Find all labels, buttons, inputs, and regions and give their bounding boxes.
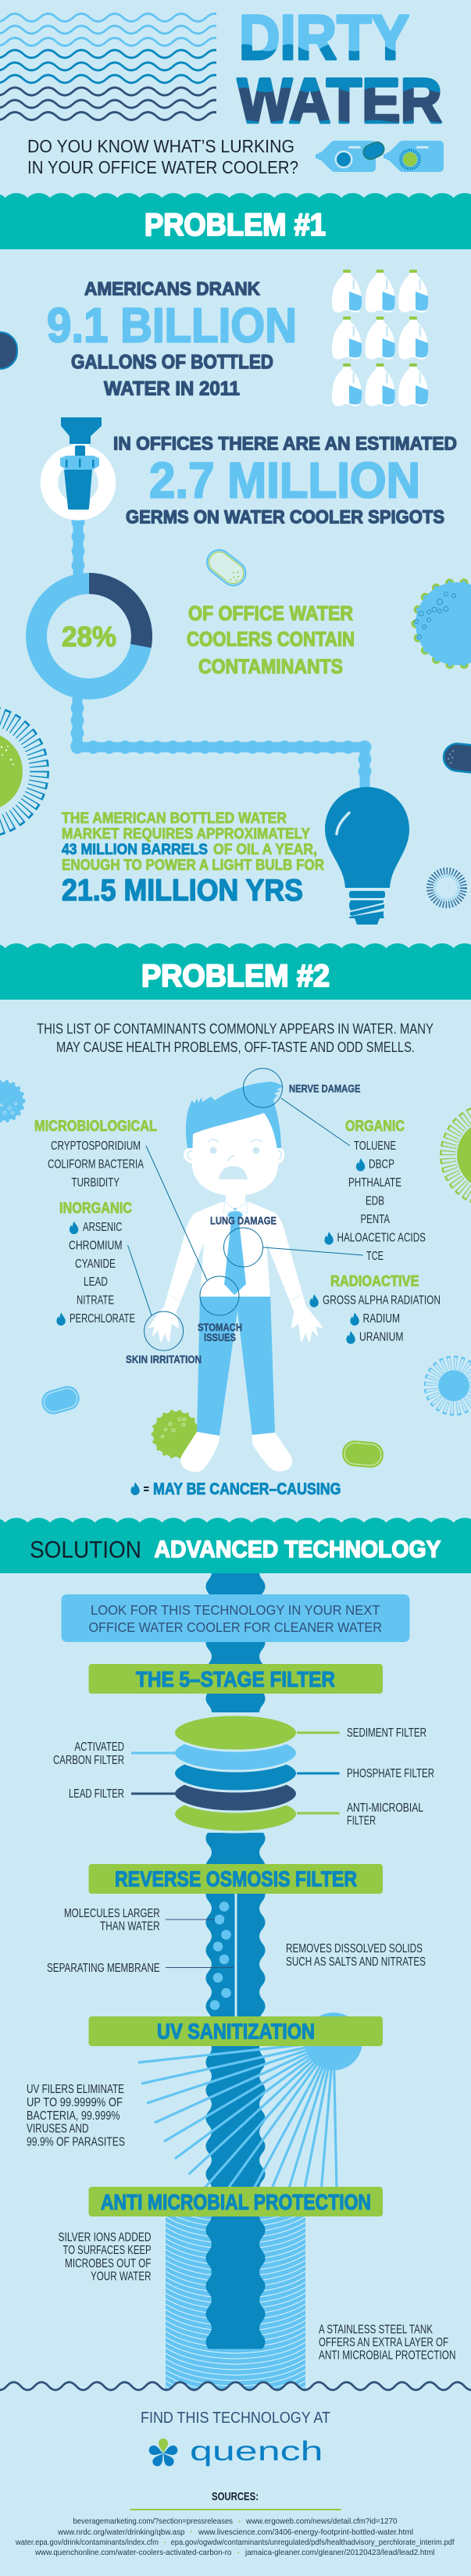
trousers	[197, 1293, 275, 1436]
list: organic: ORGANIC	[345, 1118, 405, 1135]
list: microbiological	[34, 1118, 157, 1190]
icon: cancer flame	[56, 1313, 66, 1326]
header waves	[0, 14, 240, 120]
list: inorganic: PERCHLORATE	[70, 1312, 135, 1326]
list: microbiological: MICROBIOLOGICAL	[34, 1118, 157, 1135]
stat: 9.1 billion gallons: GALLONS OF BOTTLED	[71, 352, 273, 374]
callouts: health effects	[128, 1068, 363, 1351]
stat: 2.7 million germs: IN OFFICES THERE ARE AN ESTIMATED	[113, 433, 457, 455]
uv text: VIRUSES AND	[27, 2123, 89, 2135]
list: organic: EDB	[366, 1194, 384, 1208]
sources list: www.nrdc.org/water/drinking/qbw.asp	[57, 2528, 185, 2537]
reverse osmosis labels: MOLECULES LARGER	[64, 1907, 160, 1920]
wave line: pipe base	[0, 2382, 471, 2403]
icon: cancer flame	[356, 1158, 365, 1172]
sources list: jamaica-gleaner.com/gleaner/20120423/lead/lead2.html	[244, 2548, 434, 2557]
list: radioactive	[309, 1272, 441, 1344]
callout box: look for this technology	[61, 1594, 409, 1642]
logo: quench: quench	[190, 2436, 323, 2467]
stat: 9.1 billion gallons: WATER IN 2011	[104, 378, 240, 400]
legend: cancer causing: MAY BE CANCER–CAUSING	[153, 1480, 341, 1498]
mouth	[219, 1166, 248, 1179]
callout labels: NERVE DAMAGE	[289, 1082, 361, 1094]
germ: blue capsule	[39, 1383, 82, 1417]
filter diagram: five discs	[131, 1712, 340, 1833]
uv text: 99.9% OF PARASITES	[27, 2135, 125, 2149]
filter labels: CARBON FILTER	[53, 1754, 124, 1767]
list: microbiological: TURBIDITY	[72, 1176, 120, 1190]
title: water: WATER	[237, 66, 442, 136]
list: organic	[324, 1118, 426, 1263]
germ: dark capsule right	[442, 742, 471, 775]
title: dirty	[241, 14, 409, 61]
water stream: donut to bulb	[77, 697, 365, 789]
uv text: UP TO 99.9999% OF	[27, 2096, 123, 2109]
donut chart: 28 percent	[36, 573, 152, 689]
sources list: www.quenchonline.com/water-coolers-activated-carbon-ro	[34, 2548, 232, 2557]
band: problem 2	[0, 948, 471, 1000]
text: oil use and bulb hours: THE AMERICAN BOTTLED WATER	[62, 810, 287, 827]
text: oil use and bulb hours: OF OIL A YEAR,	[213, 841, 317, 858]
eyebrows and eyes	[209, 1140, 262, 1161]
uv lamp with rays	[138, 2012, 362, 2188]
list: radioactive: RADIOACTIVE	[330, 1272, 419, 1290]
callout labels	[126, 1082, 361, 1365]
icon: cancer flame	[350, 1313, 359, 1326]
list: microbiological: COLIFORM BACTERIA	[48, 1158, 144, 1171]
icon: cancer flame	[309, 1294, 319, 1308]
callout labels: ISSUES	[204, 1331, 236, 1343]
icon: cancer flame	[70, 1221, 78, 1234]
text: oil use and bulb hours: 43 MILLION BARRELS	[62, 841, 208, 858]
filter labels: LEAD FILTER	[69, 1787, 124, 1801]
uv text: UV FILERS ELIMINATE	[27, 2083, 124, 2096]
anti microbial text left: TO SURFACES KEEP	[62, 2244, 152, 2257]
text: contaminants	[187, 603, 355, 678]
title: water	[236, 77, 442, 123]
face	[192, 1113, 278, 1196]
subtitle	[27, 136, 298, 177]
callout labels: STOMACH	[198, 1321, 242, 1333]
subtitle: DO YOU KNOW WHAT’S LURKING	[27, 136, 294, 156]
list: inorganic: CHROMIUM	[69, 1240, 122, 1252]
anti microbial text right	[319, 2323, 456, 2362]
stat: 2.7 million germs	[113, 433, 457, 528]
anti microbial text right: A STAINLESS STEEL TANK	[319, 2323, 433, 2337]
hair	[186, 1082, 284, 1148]
filter labels	[53, 1726, 434, 1827]
filter labels: FILTER	[347, 1815, 376, 1827]
text: find this technology at: FIND THIS TECHNOLOGY AT	[141, 2410, 330, 2427]
title: water: WATER	[237, 66, 442, 136]
list: organic: HALOACETIC ACIDS	[337, 1232, 426, 1244]
list: radioactive: RADIUM	[362, 1312, 400, 1326]
shirt and arms	[164, 1202, 306, 1313]
list: organic: TOLUENE	[354, 1140, 396, 1153]
heading: solution: SOLUTION	[30, 1536, 141, 1563]
heading bar: reverse osmosis: REVERSE OSMOSIS FILTER	[115, 1866, 357, 1891]
anti microbial text left: YOUR WATER	[91, 2270, 152, 2284]
germ: blue with green wavy edge	[414, 582, 471, 665]
anti microbial text left: MICROBES OUT OF	[65, 2257, 152, 2270]
reverse osmosis labels: THAN WATER	[100, 1919, 160, 1934]
heading: problem 1: PROBLEM #1	[145, 208, 326, 242]
uv text	[27, 2083, 125, 2149]
ears	[184, 1147, 194, 1164]
hands	[149, 1308, 178, 1341]
sources list	[15, 2517, 455, 2557]
germ: green sun left	[0, 714, 39, 828]
heading bar: uv sanitization	[89, 2016, 383, 2046]
intro text: contaminants list	[37, 1021, 434, 1055]
icon: bottles with germs	[316, 140, 444, 172]
list: organic: PENTA	[361, 1213, 390, 1226]
anti microbial text left	[58, 2231, 152, 2284]
filter labels: ANTI-MICROBIAL	[347, 1801, 423, 1815]
germ: pale capsule	[202, 546, 251, 590]
list: radioactive: URANIUM	[359, 1330, 403, 1344]
sources list: www.livescience.com/3406-energy-footprint-bottled-water.html	[198, 2528, 413, 2537]
text: oil use and bulb hours: MARKET REQUIRES APPROXIMATELY	[62, 825, 310, 843]
subtitle: IN YOUR OFFICE WATER COOLER?	[27, 157, 298, 177]
filter labels: ACTIVATED	[74, 1741, 124, 1754]
reverse osmosis diagram	[166, 1894, 237, 2016]
band: solution	[0, 1522, 471, 1573]
shoes	[180, 1432, 219, 1472]
list: organic: DBCP	[369, 1158, 394, 1171]
filter labels: SEDIMENT FILTER	[347, 1726, 426, 1740]
icon: nine milk jugs	[332, 270, 428, 406]
callout labels: LUNG DAMAGE	[210, 1215, 277, 1227]
icon: cancer flame	[346, 1331, 355, 1344]
neck	[226, 1191, 245, 1203]
list: inorganic: NITRATE	[77, 1294, 114, 1307]
number: 2.7 million: 2.7 MILLION	[149, 452, 420, 508]
sources heading: SOURCES:	[212, 2490, 259, 2503]
sources list: water.epa.gov/drink/contaminants/index.cfm	[15, 2538, 159, 2547]
anti microbial text left: SILVER IONS ADDED	[58, 2231, 152, 2245]
reverse osmosis labels	[47, 1907, 426, 1975]
icon: light bulb	[325, 787, 409, 925]
list: organic: TCE	[366, 1250, 384, 1263]
band: problem 1	[0, 198, 471, 249]
heading bar: anti microbial protection: ANTI MICROBIAL PROTECTION	[101, 2190, 371, 2214]
reverse osmosis labels: SUCH AS SALTS AND NITRATES	[286, 1955, 426, 1969]
text: contaminants: CONTAMINANTS	[198, 657, 343, 678]
list: inorganic: ARSENIC	[83, 1221, 122, 1234]
heading: problem 2: PROBLEM #2	[141, 959, 330, 993]
figure: office worker	[149, 1082, 322, 1472]
stat: 9.1 billion gallons: AMERICANS DRANK	[84, 278, 261, 300]
text: contaminants: COOLERS CONTAIN	[187, 628, 355, 650]
germ: green wavy	[153, 1411, 198, 1457]
list: inorganic: INORGANIC	[59, 1200, 132, 1217]
sources list: beveragemarketing.com/?section=pressreleases	[73, 2517, 233, 2526]
text: oil use and bulb hours	[62, 810, 324, 907]
water stream: spigot to donut	[73, 512, 83, 574]
germ: blue sun right	[430, 1362, 471, 1409]
reverse osmosis labels: REMOVES DISSOLVED SOLIDS	[286, 1942, 423, 1955]
sources list: www.ergoweb.com/news/detail.cfm?id=1270	[245, 2517, 398, 2526]
reverse osmosis labels: SEPARATING MEMBRANE	[47, 1962, 160, 1975]
germ: green sun right	[448, 1111, 471, 1200]
main water pipe	[205, 1565, 266, 2349]
heading: advanced technology: ADVANCED TECHNOLOGY	[155, 1537, 441, 1563]
collar	[223, 1201, 248, 1213]
list: organic: PHTHALATE	[348, 1176, 401, 1190]
germ: dark capsule left	[0, 332, 17, 369]
filter labels: PHOSPHATE FILTER	[347, 1767, 434, 1780]
germ: small sun	[430, 871, 464, 905]
heading bar: 5-stage filter: THE 5–STAGE FILTER	[136, 1667, 335, 1691]
list: inorganic	[56, 1200, 135, 1326]
germ: green capsule	[341, 1440, 384, 1469]
tie	[224, 1208, 246, 1295]
callout box: look for this technology: OFFICE WATER COOLER FOR CLEANER WATER	[89, 1619, 382, 1635]
text: oil use and bulb hours: ENOUGH TO POWER A LIGHT BULB FOR	[62, 857, 324, 874]
title: dirty: DIRTY	[239, 3, 409, 73]
germ: blue wavy left	[0, 1082, 23, 1121]
list: inorganic: LEAD	[84, 1275, 108, 1289]
logo: quench	[148, 2436, 323, 2468]
icon: spigot with ring	[49, 417, 107, 511]
icon: cancer flame	[324, 1232, 334, 1245]
heading bar: 5-stage filter	[89, 1664, 383, 1694]
title: water: WATER	[237, 66, 442, 136]
stat: 9.1 billion gallons	[47, 278, 297, 400]
anti microbial tank	[166, 2212, 305, 2393]
callout labels: SKIN IRRITATION	[126, 1353, 202, 1365]
uv text: BACTERIA, 99.999%	[27, 2109, 120, 2123]
donut label: 28%	[62, 621, 116, 653]
callout box: look for this technology: LOOK FOR THIS TECHNOLOGY IN YOUR NEXT	[91, 1602, 380, 1618]
list: inorganic: CYANIDE	[75, 1258, 116, 1271]
list: microbiological: CRYPTOSPORIDIUM	[51, 1140, 141, 1153]
stat: 2.7 million germs: GERMS ON WATER COOLER SPIGOTS	[126, 506, 444, 528]
number: 21.5 million years: 21.5 MILLION YRS	[62, 874, 303, 907]
title: dirty: DIRTY	[239, 3, 409, 73]
text: contaminants: OF OFFICE WATER	[188, 603, 353, 625]
heading bar: uv sanitization: UV SANITIZATION	[157, 2020, 315, 2043]
number: 9.1 billion: 9.1 BILLION	[47, 299, 297, 353]
